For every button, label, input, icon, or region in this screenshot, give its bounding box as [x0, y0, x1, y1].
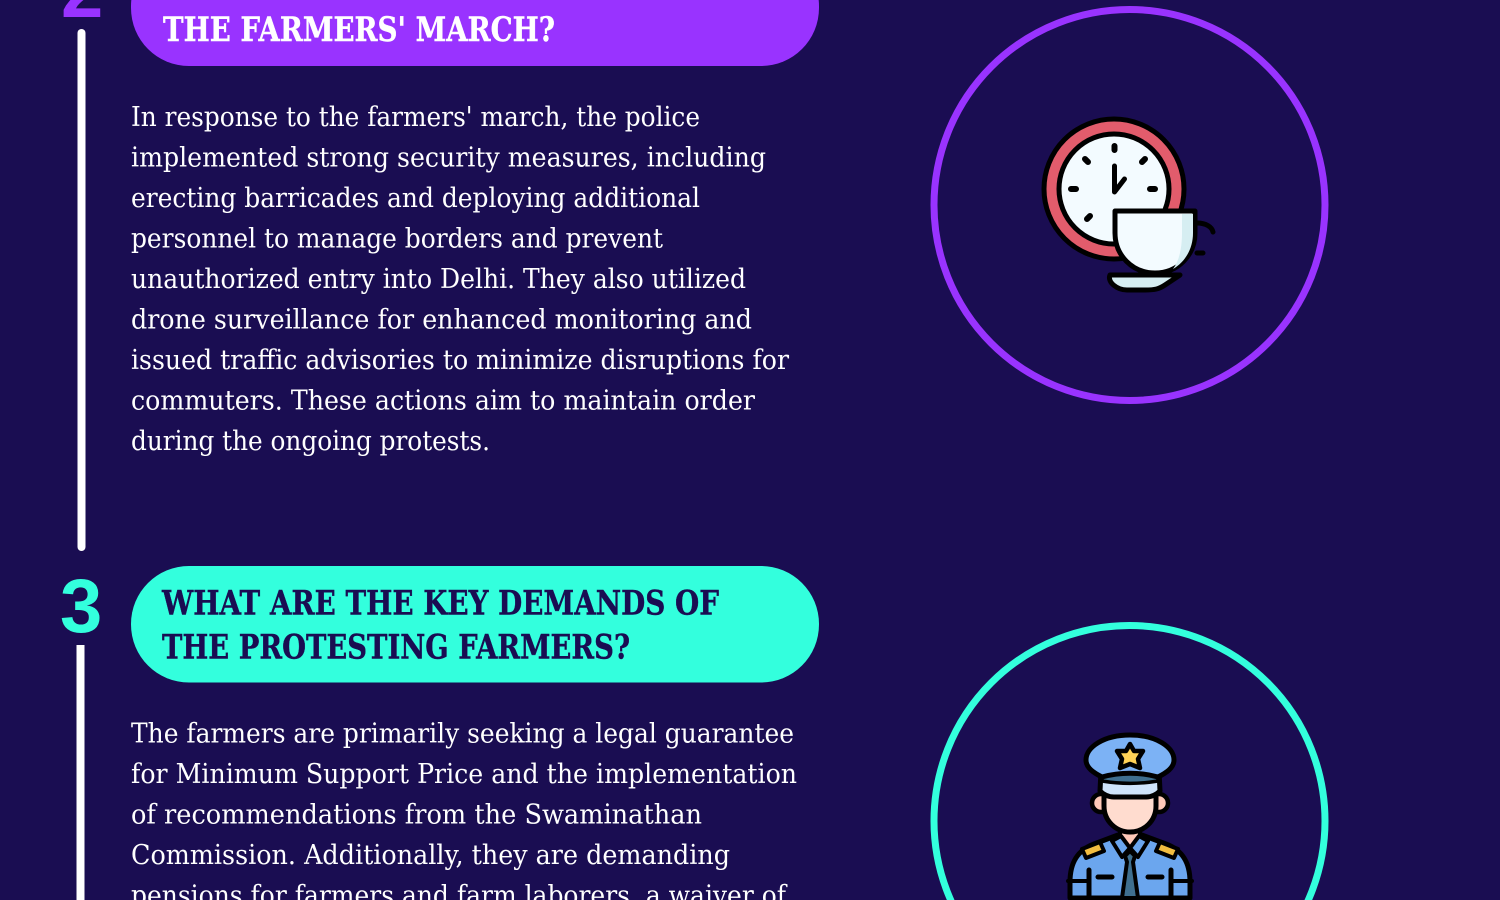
- section 2 timeline bar: [78, 29, 86, 551]
- section 3 body text: of recommendations from the Swaminathan: [131, 798, 702, 830]
- section 3 circle frame: [934, 626, 1325, 900]
- section 2 body text: erecting barricades and deploying additional: [131, 182, 700, 214]
- section 2 body text: unauthorized entry into Delhi. They also utilized: [131, 263, 746, 295]
- section 3 heading pill: THE PROTESTING FARMERS?: [162, 628, 630, 668]
- section 3 body text: The farmers are primarily seeking a legal guarantee: [131, 718, 794, 750]
- section 3 timeline bar: [76, 645, 84, 900]
- section 2 heading pill: THE FARMERS' MARCH?: [163, 10, 555, 50]
- section 2 body text: In response to the farmers' march, the police: [131, 101, 700, 133]
- section 2 body text: implemented strong security measures, including: [131, 142, 766, 174]
- section 3 heading pill: [131, 566, 819, 682]
- section 3 body text: Commission. Additionally, they are demanding: [131, 839, 730, 871]
- section 2 circle frame: [934, 10, 1325, 400]
- section 3 heading pill: WHAT ARE THE KEY DEMANDS OF: [161, 584, 719, 624]
- section 2 body text: personnel to manage borders and prevent: [131, 222, 663, 254]
- section 3 body text: for Minimum Support Price and the implementation: [131, 758, 797, 790]
- section 2 body text: commuters. These actions aim to maintain order: [131, 384, 756, 416]
- icon: police officer: [1068, 735, 1192, 898]
- section 2 body text: during the ongoing protests.: [131, 425, 490, 457]
- section 2 body text: [131, 101, 790, 457]
- section 3 body text: [131, 718, 797, 900]
- section 2 body text: drone surveillance for enhanced monitoring and: [131, 304, 752, 336]
- section 2 heading pill: [131, 0, 819, 66]
- icon: clock and coffee cup: [1044, 119, 1213, 290]
- section 3 number: 3: [60, 564, 102, 649]
- section 2 body text: issued traffic advisories to minimize disruptions for: [131, 344, 790, 376]
